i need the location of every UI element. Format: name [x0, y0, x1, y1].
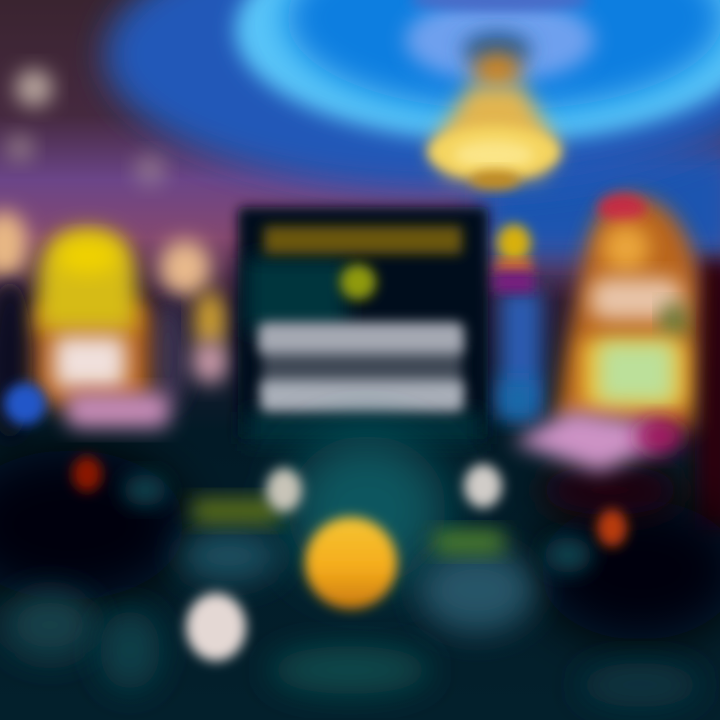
white chip top left — [266, 468, 302, 512]
panel white text bar 1 — [258, 322, 464, 354]
left slot machine — [34, 228, 170, 428]
blue light — [4, 383, 46, 425]
ceiling lights — [6, 69, 166, 186]
white chip bottom — [186, 593, 246, 661]
panel yellow dot — [340, 264, 376, 300]
left green label — [192, 498, 280, 524]
right slot machine — [512, 194, 698, 472]
red light — [72, 456, 102, 492]
centre sign panel — [238, 207, 488, 444]
orange light — [597, 509, 627, 547]
golden ball — [305, 517, 397, 609]
right dark edge — [540, 260, 720, 640]
ceiling: blue swirl — [105, 0, 720, 260]
white chip top right — [464, 464, 502, 508]
panel heading bar — [264, 226, 462, 254]
table glow — [4, 435, 700, 707]
chandelier — [428, 52, 560, 190]
left background glow — [0, 211, 228, 600]
right green label — [434, 530, 504, 554]
panel white text bar 2 — [260, 380, 464, 412]
blue column with colour stripes — [494, 224, 542, 420]
panel band background — [262, 345, 462, 390]
